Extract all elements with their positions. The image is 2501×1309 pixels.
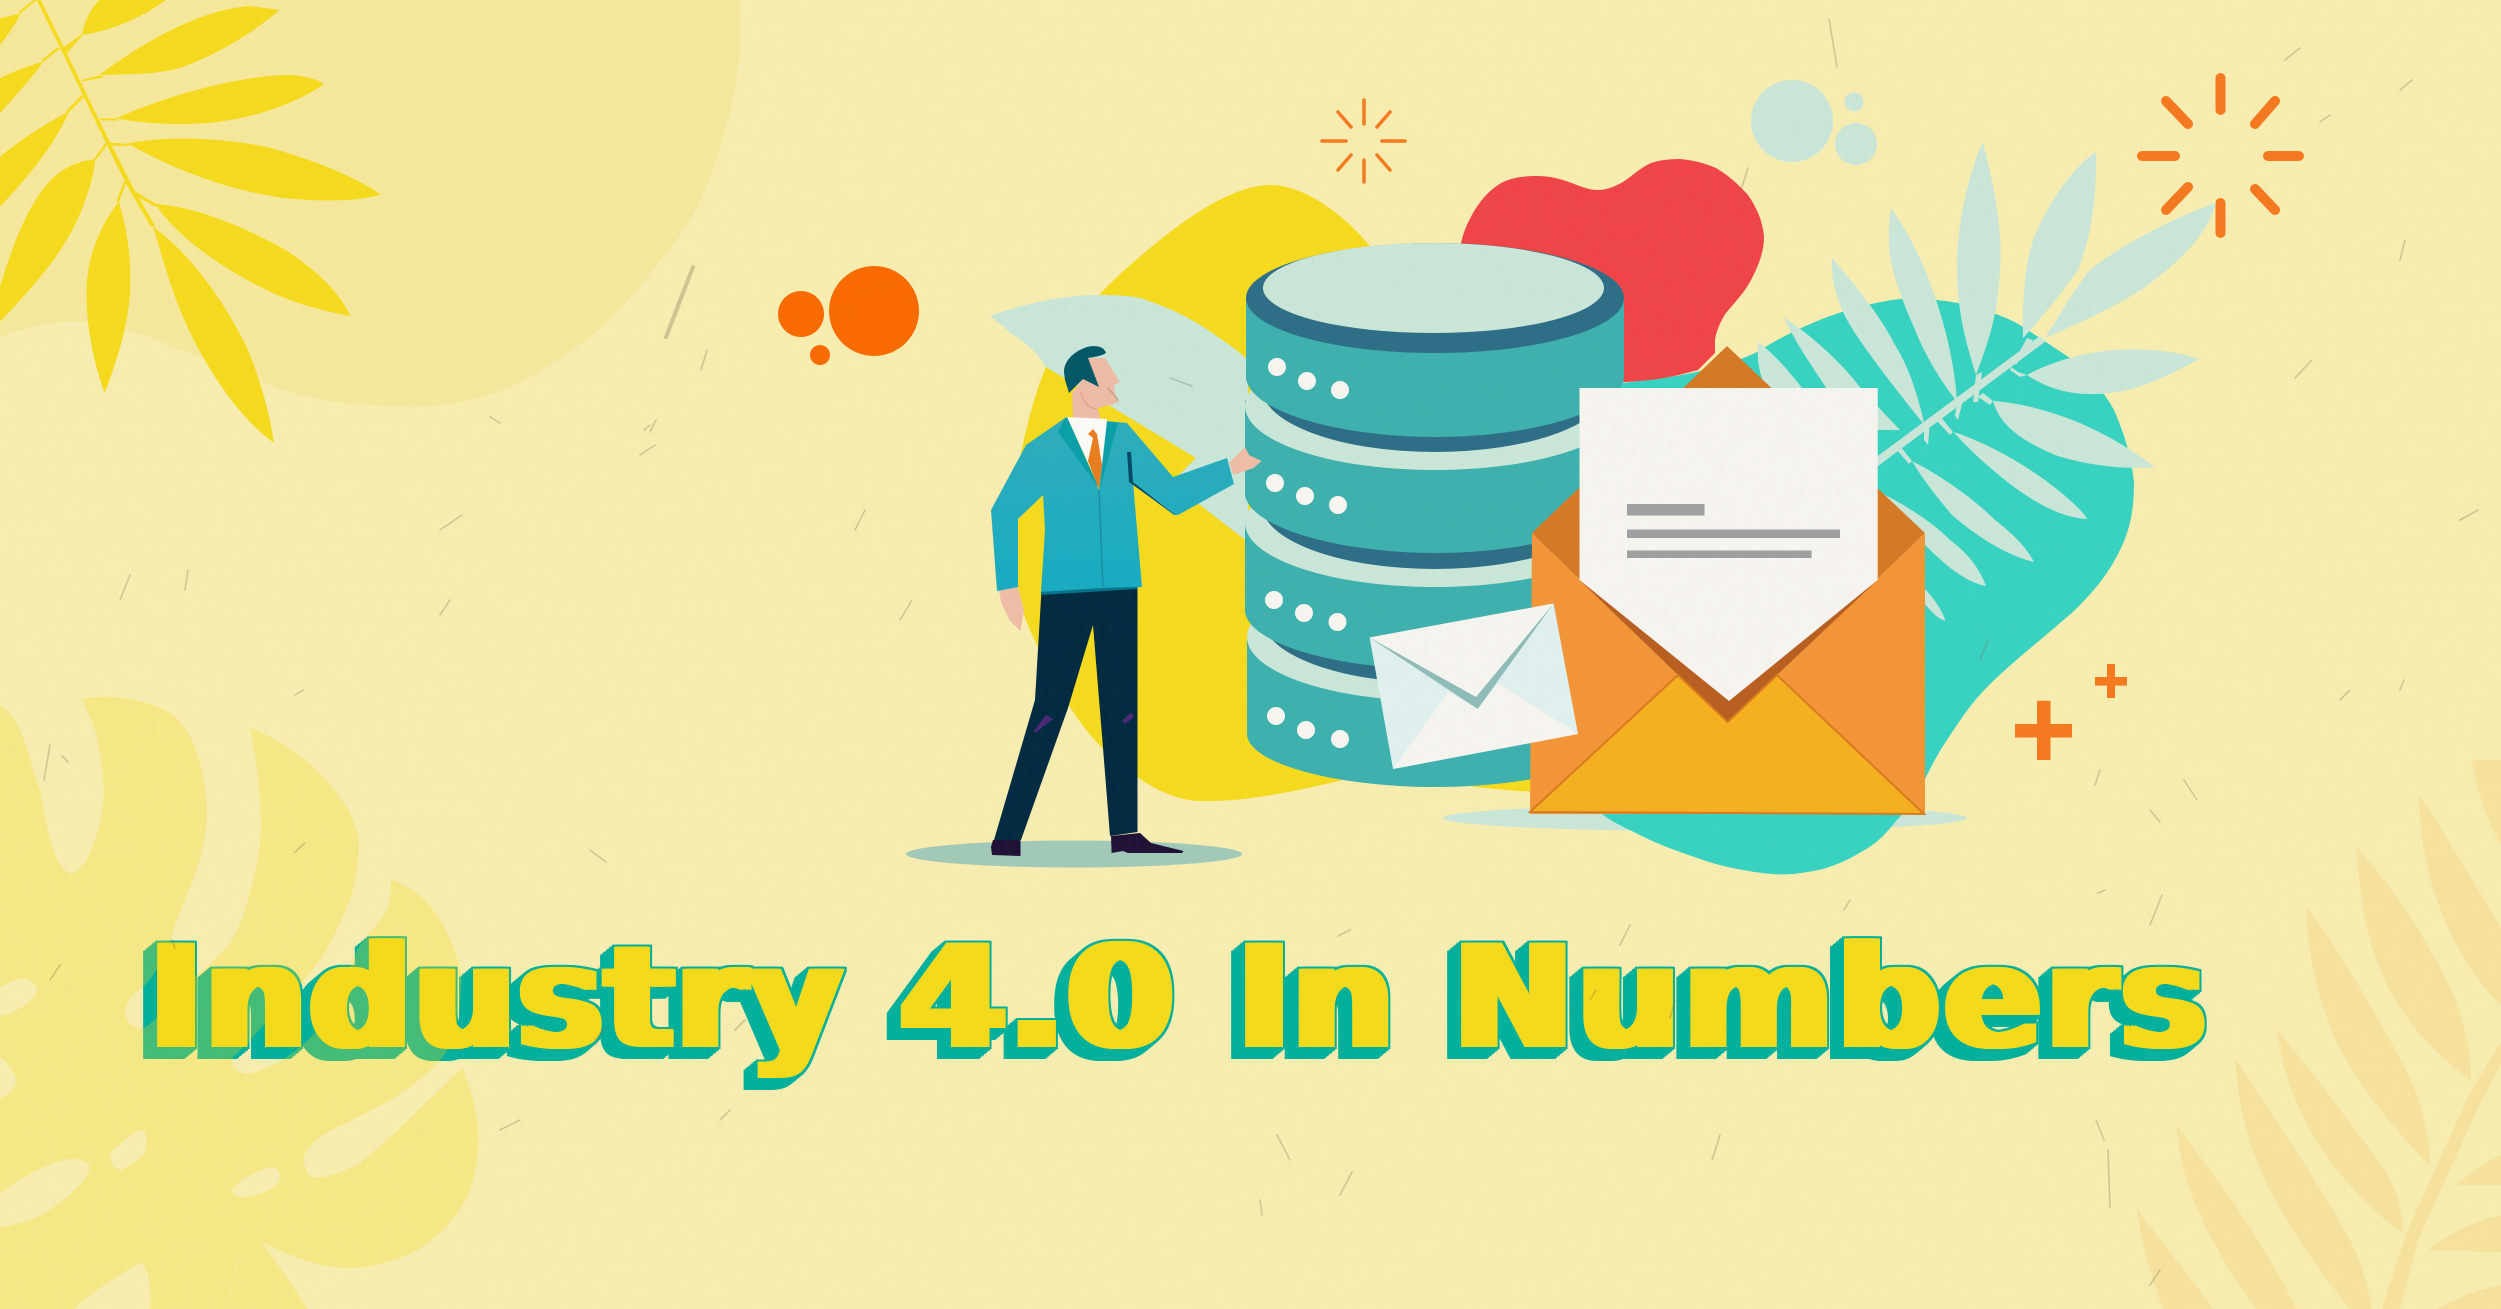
big orange dot — [829, 266, 919, 356]
envelope body — [1370, 604, 1578, 769]
mint circles — [1751, 80, 1877, 165]
envelope ground shadow — [1443, 805, 1967, 831]
man ground shadow — [906, 840, 1242, 868]
shoes — [991, 833, 1184, 856]
right hand — [1229, 447, 1262, 475]
leaf — [82, 0, 166, 35]
lapels — [1058, 417, 1118, 488]
palm stem — [1695, 336, 2046, 600]
yellow blob behind man — [1017, 185, 1540, 801]
letter shadow — [1580, 580, 1878, 722]
side panels — [1530, 533, 1925, 814]
large orange sunburst — [2142, 78, 2299, 233]
pale leaf behind man — [990, 295, 1248, 542]
front flap — [1530, 675, 1924, 814]
top-left pale blob — [0, 0, 740, 407]
jacket centre seam — [1099, 490, 1103, 587]
face and neck — [1072, 358, 1120, 428]
flap shadow — [1370, 604, 1554, 709]
pale palm over teal blob — [1695, 142, 2216, 621]
palm bottom-right — [2137, 760, 2501, 1309]
sleeve shadow — [1127, 452, 1175, 515]
palm: top-left yellow — [0, 0, 381, 443]
trouser patches — [1033, 712, 1134, 732]
title: Numbers — [1454, 914, 2210, 1081]
letter paper — [1580, 388, 1878, 701]
back flap — [1532, 346, 1925, 722]
palm leaf — [2472, 760, 2501, 846]
palm stem — [2382, 1042, 2501, 1309]
monstera leaf bottom-left — [0, 697, 479, 1309]
left hand — [999, 587, 1024, 631]
small orange sunburst — [1322, 100, 1405, 182]
flap — [1370, 604, 1554, 697]
tier 1 — [1246, 243, 1624, 437]
businessman — [991, 346, 1262, 856]
letter lines — [1627, 504, 1840, 558]
bottom panel — [1393, 683, 1578, 769]
shirt — [1067, 417, 1107, 489]
small plus — [2095, 664, 2127, 698]
title: Industry — [150, 914, 844, 1081]
palm leaf — [1957, 142, 2001, 375]
jaw crease — [1081, 392, 1097, 409]
large open envelope — [1530, 346, 1925, 814]
teal blob — [1500, 299, 2134, 874]
tier 2 — [1245, 324, 1625, 553]
title: 4.0 — [899, 914, 1174, 1081]
hair — [1064, 346, 1106, 393]
database cylinder — [1245, 243, 1625, 787]
tier 4 — [1247, 555, 1624, 787]
jacket hem — [1041, 587, 1137, 595]
tie — [1088, 429, 1102, 489]
palm stem — [37, 0, 156, 227]
tier 3 — [1245, 441, 1625, 669]
title — [150, 914, 2210, 1081]
trousers — [994, 585, 1138, 840]
title: In — [1238, 914, 1396, 1081]
jacket — [991, 418, 1234, 592]
big mint circle — [1751, 80, 1833, 162]
red blob — [1460, 159, 1764, 400]
server dots — [1265, 358, 1349, 748]
large plus — [2015, 701, 2072, 760]
orange dots top-left of illustration — [778, 266, 919, 365]
small envelope — [1370, 604, 1578, 769]
plus signs — [2015, 664, 2127, 760]
